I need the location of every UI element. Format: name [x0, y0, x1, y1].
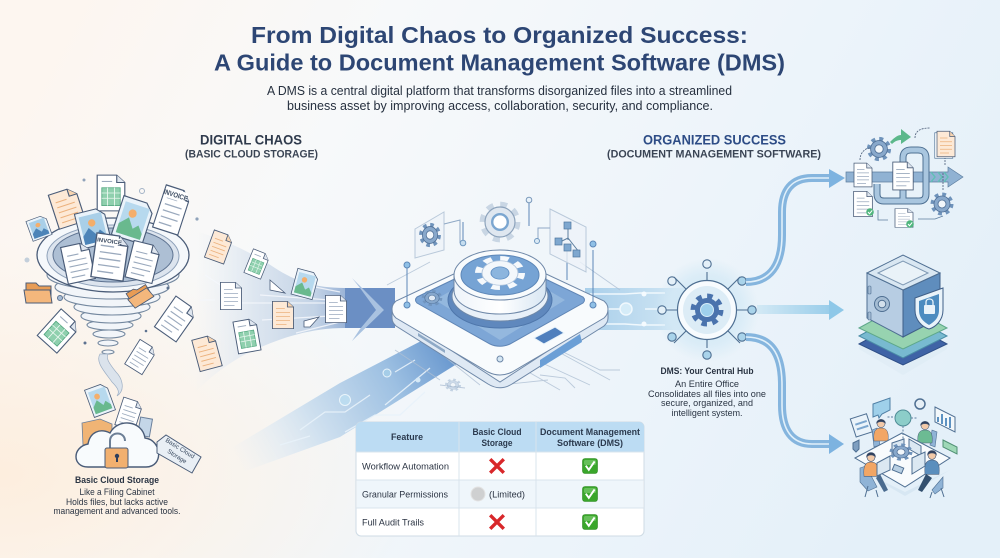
intro text: business asset by improving access, collaboration, security, and compliance. [287, 99, 713, 113]
arrow: hub to workflow [746, 169, 845, 282]
text: basic cloud storage: Like a Filing Cabinet [80, 487, 155, 498]
scattered chaos documents: INVOICE [97, 237, 122, 247]
icon: secure vault [859, 255, 947, 375]
table header row: Storage [482, 438, 512, 448]
title [214, 22, 785, 76]
text: basic cloud storage: management and advanced tools. [54, 506, 180, 517]
text: central hub [648, 366, 766, 419]
text: central hub: An Entire Office [675, 379, 739, 390]
scattered chaos documents: INVOICE [162, 188, 189, 203]
table header row [356, 422, 644, 452]
table row: granular permissions [362, 486, 598, 502]
table row: workflow automation [362, 458, 598, 474]
tornado [37, 218, 189, 396]
heading: organized success: ORGANIZED SUCCESS [643, 132, 786, 148]
icon: top gear [483, 205, 517, 239]
heading: organized success [607, 132, 821, 160]
icon: basic cloud storage: Storage [166, 448, 188, 466]
table row: granular permissions: Granular Permissions [362, 490, 448, 500]
table row: full audit trails: Full Audit Trails [362, 518, 424, 528]
table row: workflow automation: Workflow Automation [362, 462, 449, 472]
arrow: hub to security [757, 300, 844, 320]
intro text: A DMS is a central digital platform that transforms disorganized files into a streamlined [267, 84, 732, 98]
table header row: Software (DMS) [557, 438, 623, 448]
text: basic cloud storage: Holds files, but lacks active [66, 497, 168, 508]
title: A Guide to Document Management Software (DMS) [214, 50, 785, 76]
scattered chaos documents [24, 175, 347, 375]
icon: basic cloud storage [76, 383, 201, 473]
central-to-hub data band [585, 288, 690, 330]
text: basic cloud storage: Basic Cloud Storage [75, 475, 159, 486]
text: basic cloud storage [54, 475, 180, 517]
table header row: Feature [391, 432, 423, 442]
table header row: Basic Cloud [472, 427, 522, 437]
central platform [387, 197, 620, 390]
heading: organized success: (DOCUMENT MANAGEMENT SOFTWARE) [607, 148, 821, 160]
comparison table [356, 422, 644, 536]
icon: central hub [655, 258, 759, 362]
lower circuit band [233, 340, 460, 473]
table header row: Document Management [540, 427, 640, 437]
document stream band [190, 230, 395, 397]
table row: granular permissions: (Limited) [489, 490, 525, 500]
text: central hub: secure, organized, and [661, 398, 753, 409]
icon: basic cloud storage: Basic Cloud [164, 437, 196, 461]
arrow: hub to collaboration [746, 337, 844, 454]
intro text [267, 84, 732, 113]
title: From Digital Chaos to Organized Success: [251, 22, 748, 48]
table row: full audit trails [362, 514, 598, 530]
icon: gear panel [415, 212, 466, 258]
icon: team collaboration [850, 398, 957, 498]
text: central hub: intelligent system. [672, 408, 742, 419]
heading: digital chaos [185, 132, 318, 160]
heading: digital chaos: (BASIC CLOUD STORAGE) [185, 148, 318, 160]
heading: digital chaos: DIGITAL CHAOS [200, 132, 302, 148]
text: central hub: DMS: Your Central Hub [660, 366, 754, 377]
icon: workflow pipeline [846, 128, 963, 228]
icon: org chart panel [534, 209, 586, 272]
text: central hub: Consolidates all files into one [648, 389, 766, 400]
